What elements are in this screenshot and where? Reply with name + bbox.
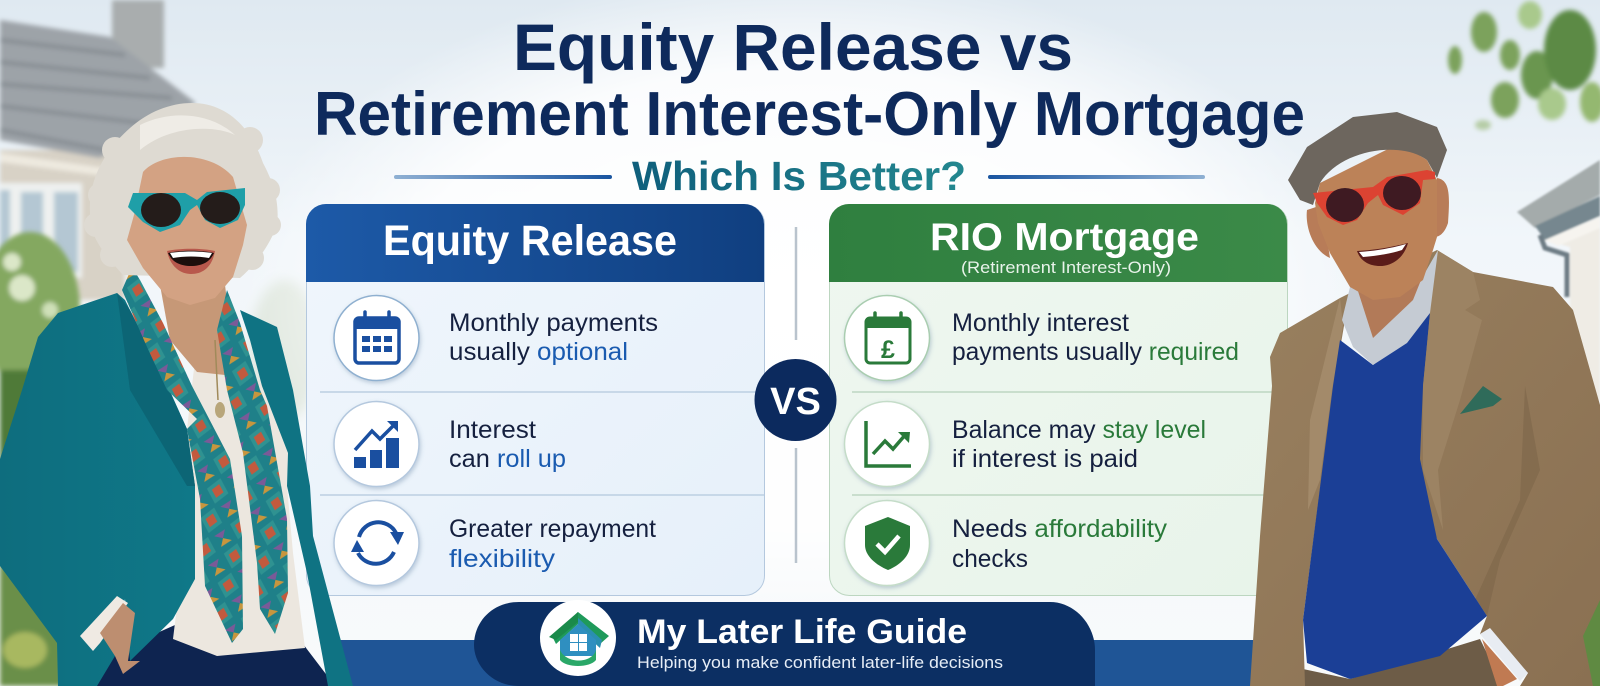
text: Monthly payments [449,309,658,337]
header: equity release [306,204,764,282]
header: rio mortgage: RIO Mortgage [930,216,1199,259]
text [952,416,1206,473]
text: if interest is paid [952,445,1138,473]
row: flexibility [334,500,656,586]
sunglasses [1313,170,1435,225]
ears [1307,178,1449,258]
figure: woman [0,103,353,686]
panel: rio mortgage [829,204,1288,596]
text: can roll up [449,445,566,473]
brand text: My Later Life Guide [637,613,967,651]
panel: equity release [306,204,764,596]
divider line [795,227,797,563]
figure: man [1250,112,1600,686]
vs badge [754,359,836,441]
bush: lower right [1580,595,1600,686]
sleeve shading [1475,386,1540,616]
sunglasses [128,188,245,232]
hand [1482,639,1517,686]
text [449,416,566,473]
subtitle [394,153,1205,199]
mouth [167,249,215,274]
row: affordability [844,500,1168,586]
text: payments usually required [952,338,1239,366]
text [952,515,1168,573]
text [449,515,656,573]
trousers [92,625,335,686]
header: rio mortgage: (Retirement Interest-Only) [961,258,1171,277]
tree: distant [250,280,320,420]
icon: calendar [334,296,419,380]
trousers [1297,639,1503,686]
jacket [1250,250,1600,686]
tree leaves [1448,1,1600,130]
icon: shield [844,500,930,586]
pendant [215,340,225,418]
text: checks [952,545,1028,573]
header: rio mortgage [829,204,1287,282]
title [314,10,1305,149]
brand text [637,613,1003,672]
header: equity release: Equity Release [383,217,677,265]
text [449,309,658,366]
hair [84,103,281,278]
scarf [122,267,288,643]
vs badge: VS [770,381,821,423]
icon: refresh arrows [334,500,419,586]
neck [160,285,232,375]
bushes: left [0,232,80,686]
left lapel [1308,298,1343,510]
title: Equity Release vs [513,10,1073,84]
text [952,309,1239,366]
logo [540,600,616,676]
brand pill [474,600,1095,686]
shirt [1342,250,1438,365]
icon: pound calendar: £ [881,336,895,364]
flat cap [1288,112,1447,205]
face [127,157,247,305]
text: flexibility [449,545,556,573]
jacket: lapel shading [117,293,195,486]
text: Interest [449,416,536,444]
right lapel [1423,250,1482,530]
hand [100,603,140,674]
sweater [1303,313,1487,679]
title: Retirement Interest-Only Mortgage [314,80,1305,149]
sweater [173,360,305,656]
house: right [1517,160,1600,400]
icon: pound calendar [844,296,930,380]
footer band [340,640,1260,686]
text: Monthly interest [952,309,1129,337]
subtitle: Which Is Better? [632,153,966,199]
text: Balance may stay level [952,416,1206,444]
jacket [0,293,195,686]
neck [1357,270,1425,338]
cuff [80,596,128,651]
icon: line chart [844,402,930,486]
house: left [0,0,196,300]
text: Greater repayment [449,515,656,543]
row: monthly interest [844,296,1239,380]
face [1315,143,1437,300]
text: usually optional [449,338,628,366]
icon: growth chart [334,402,419,486]
cuff [1480,628,1528,681]
jacket: right side [240,310,353,686]
brand text: Helping you make confident later-life decisions [637,653,1003,672]
row: balance [844,402,1206,486]
row: interest [334,402,566,486]
text: Needs affordability [952,515,1168,543]
row: monthly payments [334,296,658,380]
mouth [1357,243,1408,266]
pocket square [1460,386,1502,414]
